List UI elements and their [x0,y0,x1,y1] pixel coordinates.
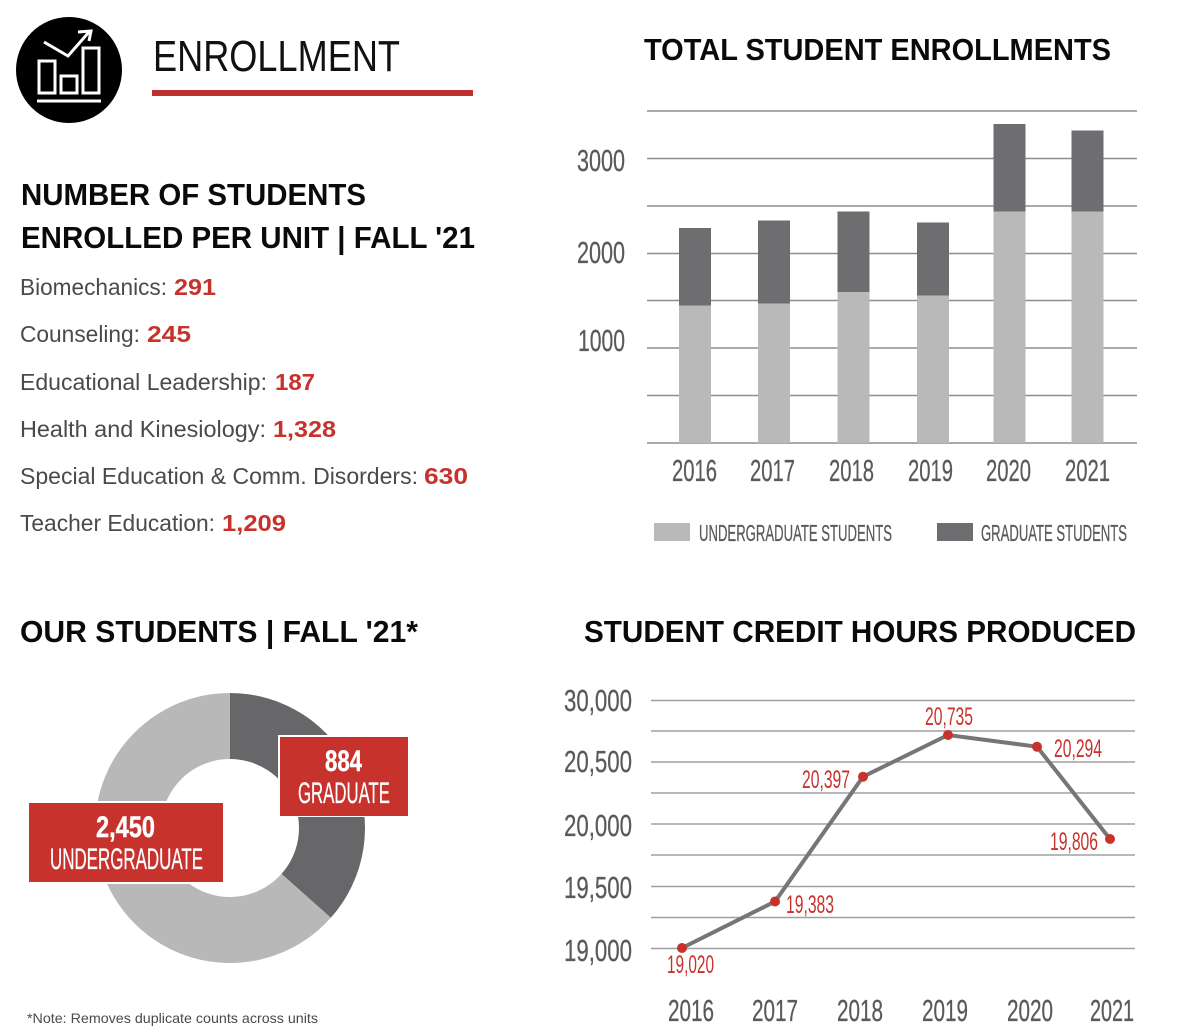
stacked bar chart: total student enrollments: 2021 [1065,453,1110,488]
title underline [152,90,473,96]
heading: student credit hours: STUDENT CREDIT HOURS PRODUCED [584,614,1136,649]
line chart: student credit hours produced: 20,000 [564,808,632,843]
legend: enrollment chart: UNDERGRADUATE STUDENTS [699,520,892,546]
stacked bar chart: total student enrollments: 2020 [986,453,1031,488]
stacked bar chart: total student enrollments: 2016 [672,453,717,488]
line chart: student credit hours produced [564,683,1135,1028]
list: students enrolled per unit [20,274,468,536]
stacked bar chart: total student enrollments: 2017 [750,453,795,488]
line chart: student credit hours produced: 2018 [837,993,883,1028]
list: students enrolled per unit: 291 [174,274,216,300]
list: students enrolled per unit: 1,328 [273,416,336,442]
callout: undergraduate count [27,801,225,884]
callout: graduate count: 884 [325,745,362,778]
heading: total student enrollments: TOTAL STUDENT ENROLLMENTS [644,32,1111,67]
list: students enrolled per unit: 245 [147,321,191,347]
heading: students per unit [21,177,475,255]
stacked bar chart: total student enrollments: 1000 [578,323,625,358]
line chart: student credit hours produced: 19,500 [564,870,632,905]
line chart: student credit hours produced: 20,397 [802,766,850,794]
list: students enrolled per unit: 1,209 [222,510,286,536]
line chart: student credit hours produced: 20,294 [1054,735,1102,763]
stacked bar chart: total student enrollments: 2000 [577,235,625,270]
list: students enrolled per unit: Counseling: [20,321,140,347]
list: students enrolled per unit: 630 [424,463,468,489]
callout: graduate count [278,735,409,817]
line chart: student credit hours produced: 2019 [922,993,968,1028]
line chart: student credit hours produced: 19,020 [667,951,714,979]
callout: undergraduate count: 2,450 [96,811,155,844]
list: students enrolled per unit: Teacher Education: [20,510,215,536]
line chart: student credit hours produced: 20,735 [925,703,973,731]
heading: students per unit: NUMBER OF STUDENTS [21,177,366,212]
list: students enrolled per unit: Educational Leadership: [20,369,267,395]
icon: enrollment bar chart with arrow [16,17,122,123]
stacked bar chart: total student enrollments: 3000 [577,143,625,178]
line chart: student credit hours produced: 2021 [1090,993,1134,1028]
line chart: student credit hours produced: 30,000 [564,683,632,718]
stacked bar chart: total student enrollments: 2019 [908,453,953,488]
line chart: student credit hours produced: 19,383 [786,891,834,919]
footnote: *Note: Removes duplicate counts across units [27,1010,318,1026]
callout: undergraduate count: UNDERGRADUATE [50,843,203,876]
list: students enrolled per unit: 187 [275,369,315,395]
list: students enrolled per unit: Health and Kinesiology: [20,416,266,442]
line chart: student credit hours produced: 2020 [1007,993,1053,1028]
heading: our students: OUR STUDENTS | FALL '21* [20,614,419,649]
callout: graduate count: GRADUATE [298,777,390,810]
line chart: student credit hours produced: 2016 [668,993,714,1028]
line chart: student credit hours produced: 19,806 [1050,828,1098,856]
donut chart: undergraduate vs graduate [95,693,365,963]
line chart: student credit hours produced: 2017 [752,993,798,1028]
title: ENROLLMENT [153,32,400,81]
list: students enrolled per unit: Biomechanics: [20,274,167,300]
line chart: student credit hours produced: 20,500 [564,744,632,779]
line chart: student credit hours produced: 19,000 [564,933,632,968]
stacked bar chart: total student enrollments: 2018 [829,453,874,488]
list: students enrolled per unit: Special Education & Comm. Disorders: [20,463,418,489]
stacked bar chart: total student enrollments [577,111,1137,488]
heading: students per unit: ENROLLED PER UNIT | FALL '21 [21,220,475,255]
